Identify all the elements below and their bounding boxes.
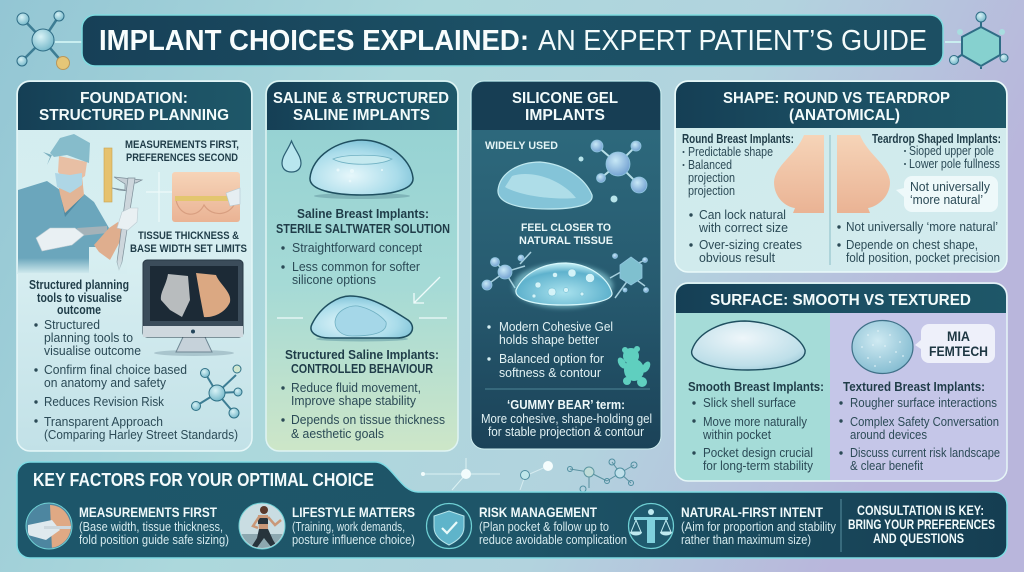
bullet list: structured saline: Reduce fluid movement, [291, 380, 421, 395]
bullet list: round: obvious result [699, 250, 775, 265]
icon: decorative molecules above footer [421, 458, 637, 492]
bullet list: saline [281, 240, 422, 287]
text: round implants: projection [688, 170, 735, 185]
text: risk management [479, 504, 627, 547]
caption: tissue thickness: TISSUE THICKNESS & [138, 230, 239, 242]
bullet list: silicone: softness & contour [499, 365, 602, 380]
icon: molecule panel one [192, 365, 242, 418]
icon: balance scales person [628, 504, 674, 548]
text: round implants: projection [688, 183, 735, 198]
bullet list: textured: Rougher surface interactions [850, 395, 997, 410]
caption: measurements first: MEASUREMENTS FIRST, [125, 139, 239, 151]
panel: key factors footer [17, 462, 1007, 558]
icon: hexagon molecule top right [945, 12, 1008, 69]
illustration: surgeon with caliper [17, 134, 142, 274]
icon: molecule top left [17, 11, 82, 70]
caption: measurements first: PREFERENCES SECOND [126, 152, 238, 164]
bullet list: textured [839, 380, 1000, 473]
caption: feel closer: NATURAL TISSUE [519, 235, 613, 247]
bullet list: textured: Discuss current risk landscape [850, 445, 1000, 460]
bullet list: saline: Straightforward concept [292, 240, 422, 255]
caption: tissue thickness: BASE WIDTH SET LIMITS [130, 243, 247, 255]
bullet list: textured: Complex Safety Conversation [850, 414, 999, 429]
bullet list: planning: visualise outcome [44, 343, 141, 358]
bullet list: structured saline: Depends on tissue thickness [291, 412, 445, 427]
bullet list: structured saline: & aesthetic goals [291, 426, 384, 441]
title banner [82, 15, 943, 66]
text: risk management: RISK MANAGEMENT [479, 504, 597, 520]
bullet list: planning: Reduces Revision Risk [44, 394, 164, 409]
bullet list: smooth: Move more naturally [703, 414, 807, 429]
callout: MIA FEMTECH [915, 324, 995, 363]
text: structured planning tools [29, 278, 129, 317]
text: natural first intent [681, 504, 837, 547]
title banner: IMPLANT CHOICES EXPLAINED: [99, 25, 529, 57]
callout: not universally more natural: Not universally [910, 179, 990, 194]
bullet list: structured saline [281, 380, 445, 441]
heading: silicone: SILICONE GEL [512, 90, 618, 107]
text: lifestyle matters: (Training, work demands, [292, 520, 405, 534]
bullet list: planning [34, 317, 238, 442]
caption: measurements first [125, 139, 239, 164]
callout: consultation is key: AND QUESTIONS [873, 530, 964, 546]
icon: molecules around gel [482, 252, 648, 298]
bullet list: planning: Structured [44, 317, 100, 332]
bullet list: textured: & clear benefit [850, 458, 923, 473]
bullet list: planning: (Comparing Harley Street Standards) [44, 427, 238, 442]
icon: water drop [282, 141, 301, 172]
panel: shape round vs teardrop [675, 81, 1007, 272]
icon: runner photo [239, 503, 285, 549]
heading: foundation [18, 82, 251, 130]
callout: MIA FEMTECH: MIA [947, 328, 970, 344]
text: lifestyle matters [292, 504, 415, 547]
text: round implants: Predictable shape [688, 144, 773, 159]
text: teardrop implants [872, 132, 1001, 171]
text: lifestyle matters: LIFESTYLE MATTERS [292, 504, 415, 520]
callout: consultation is key [848, 502, 995, 546]
icon: smooth implant [692, 321, 805, 370]
heading: foundation: STRUCTURED PLANNING [39, 107, 229, 124]
icon: structured saline implant [311, 296, 412, 342]
text: structured planning tools: tools to visualise [37, 291, 122, 305]
icon: saline implant [310, 140, 413, 199]
bullet list: teardrop [837, 219, 1000, 265]
heading: key factors: KEY FACTORS FOR YOUR OPTIMAL CHOICE [33, 470, 374, 490]
icon: cohesive gel implant [513, 263, 613, 308]
bullet list: teardrop: Not universally ‘more natural’ [846, 219, 998, 234]
heading: shape: SHAPE: ROUND VS TEARDROP [723, 90, 950, 107]
heading: saline [267, 82, 457, 130]
bullet list: smooth: Slick shell surface [703, 395, 796, 410]
heading: silicone [472, 82, 660, 130]
text: measurements first [79, 504, 229, 547]
callout: MIA FEMTECH: FEMTECH [929, 343, 988, 359]
text: structured saline implants [285, 348, 439, 376]
heading: saline: SALINE IMPLANTS [293, 107, 430, 124]
title banner: AN EXPERT PATIENT’S GUIDE [538, 25, 927, 57]
bullet list: planning: on anatomy and safety [44, 375, 166, 390]
illustration: computer monitor with 3D models [143, 260, 243, 356]
text: round implants: Balanced [688, 157, 732, 172]
bullet list: silicone: Balanced option for [499, 351, 605, 366]
bullet list: textured: Textured Breast Implants: [843, 380, 985, 394]
heading: shape: (ANATOMICAL) [789, 107, 900, 124]
icon: molecule silicone [578, 140, 647, 202]
bullet list: planning: Transparent Approach [44, 414, 163, 429]
bullet list: round: with correct size [698, 220, 788, 235]
bullet list: round [689, 207, 802, 265]
bullet list: smooth: Pocket design crucial [703, 445, 813, 460]
bullet list: silicone [487, 319, 613, 380]
bullet list: smooth: Smooth Breast Implants: [688, 380, 824, 394]
callout: not universally more natural [896, 176, 998, 212]
text: risk management: (Plan pocket & follow up to [479, 520, 609, 534]
bullet list: smooth [688, 380, 824, 473]
icon: shield [426, 504, 472, 548]
heading: surface [676, 284, 1006, 313]
icon: textured implant [852, 320, 913, 374]
text: natural first intent: rather than maximum size) [681, 533, 811, 547]
bullet list: textured: around devices [850, 427, 927, 442]
text: gummy bear term: More cohesive, shape-holding gel [481, 411, 652, 426]
text: measurements first: (Base width, tissue thickness, [79, 520, 223, 534]
bullet list: smooth: within pocket [702, 427, 771, 442]
bullet list: saline: silicone options [292, 272, 376, 287]
illustration: round profile [774, 135, 824, 213]
callout: consultation is key: CONSULTATION IS KEY: [857, 502, 984, 518]
panel: silicone gel implants [471, 81, 661, 449]
arrow: saline to structured [414, 277, 440, 303]
caption: feel closer [519, 222, 613, 247]
heading: saline: SALINE & STRUCTURED [273, 90, 449, 107]
icon: measuring photo [26, 503, 72, 550]
bullet list: silicone: holds shape better [499, 332, 600, 347]
text: measurements first: fold position guide safe sizing) [79, 533, 229, 547]
text: gummy bear term [481, 398, 652, 439]
text: gummy bear term: ‘GUMMY BEAR’ term: [507, 398, 625, 412]
bullet list: teardrop: Depende on chest shape, [846, 237, 978, 252]
icon: gummy bear [616, 346, 652, 387]
text: natural first intent: (Aim for proportion and stability [681, 520, 837, 534]
bullet list: planning: Confirm final choice based [44, 362, 187, 377]
text: measurements first: MEASUREMENTS FIRST [79, 504, 217, 520]
text: lifestyle matters: posture influence choice) [292, 533, 415, 547]
bullet list: saline: Less common for softer [292, 259, 421, 274]
heading: silicone: IMPLANTS [525, 107, 605, 124]
illustration: teardrop profile [837, 135, 890, 213]
text: natural first intent: NATURAL-FIRST INTENT [681, 504, 823, 520]
bullet list: structured saline: Improve shape stability [291, 393, 416, 408]
heading: surface: SURFACE: SMOOTH VS TEXTURED [710, 292, 971, 309]
text: round implants [682, 132, 794, 198]
icon: silicone implant dome [498, 162, 592, 209]
caption: feel closer: FEEL CLOSER TO [521, 222, 611, 234]
bullet list: smooth: for long-term stability [703, 458, 813, 473]
text: saline breast implants: Saline Breast Implants: [297, 207, 429, 221]
text: risk management: reduce avoidable complication [479, 533, 627, 547]
text: teardrop implants: Lower pole fullness [909, 156, 1000, 171]
text: teardrop implants: Sioped upper pole [909, 143, 994, 158]
bullet list: round: Over-sizing creates [699, 237, 802, 252]
text: round implants: Round Breast Implants: [682, 132, 794, 146]
caption: tissue thickness [130, 230, 247, 255]
text: saline breast implants: STERILE SALTWATER SOLUTION [276, 222, 450, 236]
bullet list: teardrop: fold position, pocket precision [846, 250, 1000, 265]
text: structured planning tools: outcome [57, 303, 101, 317]
bullet list: silicone: Modern Cohesive Gel [499, 319, 613, 334]
panel: saline and structured saline [266, 81, 458, 451]
text: gummy bear term: for stable projection & contour [488, 424, 645, 439]
bullet list: planning: planning tools to [44, 330, 133, 345]
text: structured saline implants: Structured Saline Implants: [285, 348, 439, 362]
caption: widely used: WIDELY USED [485, 140, 558, 152]
bullet list: round: Can lock natural [699, 207, 786, 222]
text: saline breast implants [276, 207, 450, 236]
text: structured saline implants: CONTROLLED BEHAVIOUR [291, 362, 433, 376]
heading: foundation: FOUNDATION: [80, 90, 188, 107]
callout: not universally more natural: ‘more natural’ [910, 192, 983, 207]
heading: shape [676, 82, 1006, 128]
panel: surface smooth vs textured [675, 283, 1007, 481]
panel: foundation structured planning [17, 81, 252, 451]
illustration: chest measuring tape [146, 172, 240, 222]
text: structured planning tools: Structured planning [29, 278, 129, 292]
